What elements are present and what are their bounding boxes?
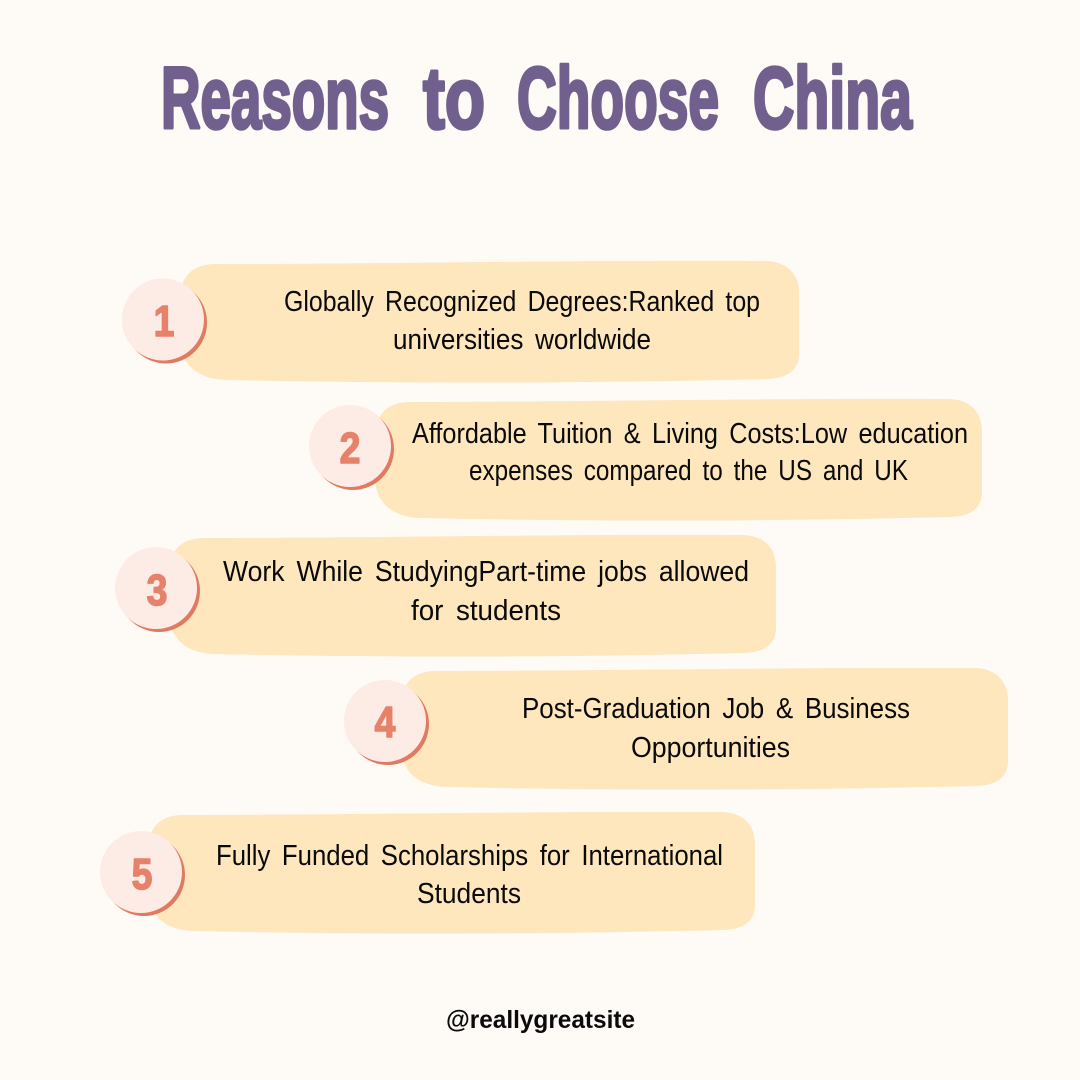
reason 4 text: Opportunities bbox=[631, 732, 790, 764]
number badge 5: 5 bbox=[132, 849, 152, 899]
number badge 2: 2 bbox=[340, 423, 360, 473]
number badge 4: 4 bbox=[375, 697, 396, 747]
reason 2 text: expenses compared to the US and UK bbox=[469, 455, 909, 487]
number badge 1: 1 bbox=[154, 296, 174, 346]
number badge 3 bbox=[115, 547, 200, 632]
panel: reason 1 bbox=[122, 261, 799, 383]
panel: reason 4 bbox=[344, 668, 1008, 790]
reason 1 text bbox=[284, 286, 760, 356]
title: Choose bbox=[517, 50, 719, 147]
reason 3 text: Work While StudyingPart-time jobs allowed bbox=[223, 556, 749, 588]
pill background 2 bbox=[375, 399, 982, 521]
reason 1 text: universities worldwide bbox=[393, 324, 651, 356]
title bbox=[161, 50, 912, 147]
reason 4 text: Post-Graduation Job & Business bbox=[522, 693, 910, 725]
panel: reason 5 bbox=[100, 812, 755, 934]
reason 5 text bbox=[216, 840, 723, 910]
number badge 2 bbox=[309, 405, 394, 490]
number badge 1 bbox=[122, 278, 207, 364]
reason 5 text: Fully Funded Scholarships for International bbox=[216, 840, 723, 872]
reason 1 text: Globally Recognized Degrees:Ranked top bbox=[284, 286, 760, 318]
pill background 4 bbox=[401, 668, 1008, 790]
pill background 5 bbox=[148, 812, 755, 934]
reason 5 text: Students bbox=[417, 878, 521, 910]
reason 2 text: Affordable Tuition & Living Costs:Low education bbox=[412, 418, 968, 450]
number badge 4 bbox=[344, 680, 429, 765]
pill background 3 bbox=[169, 535, 776, 657]
title: to bbox=[423, 50, 485, 147]
reason 2 text bbox=[412, 418, 968, 487]
title: China bbox=[753, 50, 912, 147]
reason 3 text: for students bbox=[411, 595, 561, 627]
reason 3 text bbox=[223, 556, 749, 627]
reason 4 text bbox=[522, 693, 910, 764]
number badge 5 bbox=[100, 831, 185, 916]
footer handle: @reallygreatsite bbox=[446, 1006, 635, 1034]
panel: reason 3 bbox=[115, 535, 776, 657]
title: Reasons bbox=[161, 50, 389, 147]
pill background 1 bbox=[180, 261, 799, 383]
panel: reason 2 bbox=[309, 399, 982, 521]
number badge 3: 3 bbox=[147, 565, 167, 615]
